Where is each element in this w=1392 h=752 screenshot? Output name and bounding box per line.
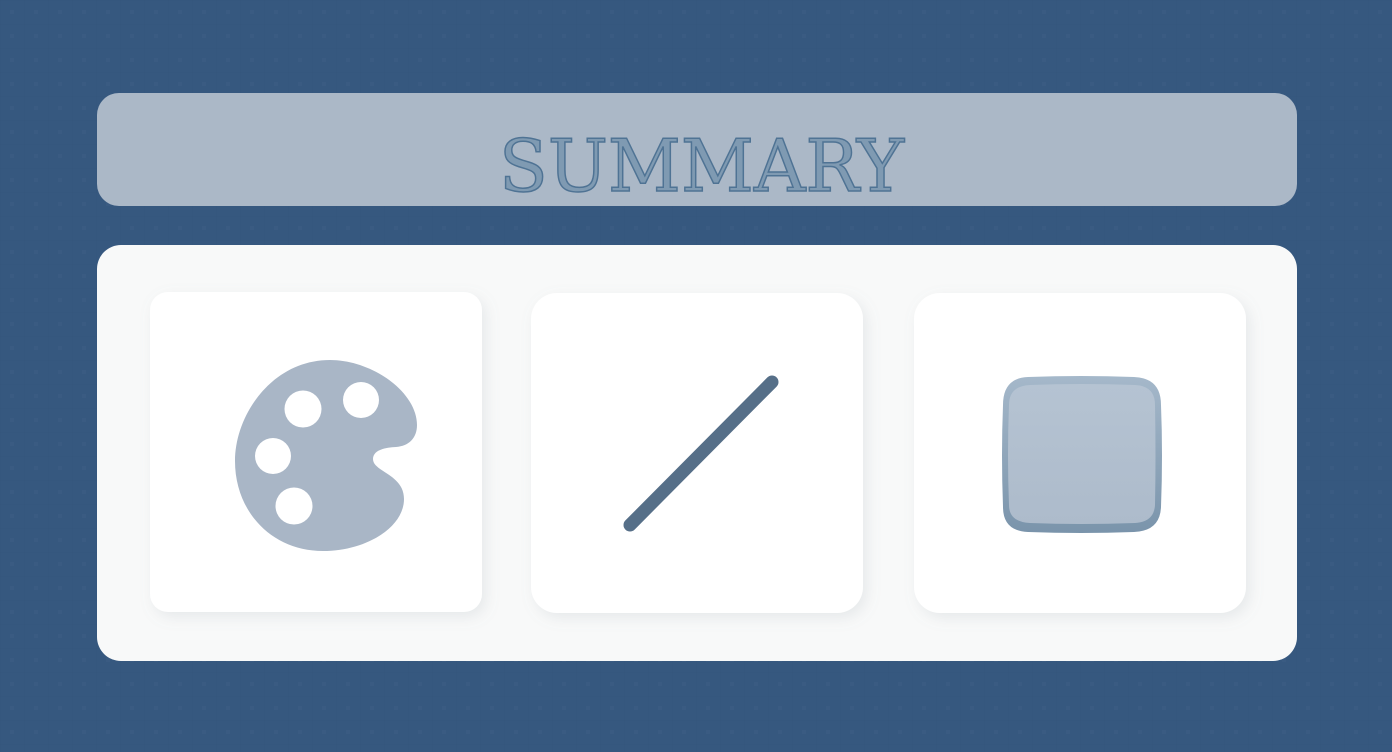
card: line	[531, 293, 863, 613]
main panel	[97, 245, 1297, 661]
card: square	[914, 293, 1246, 613]
icon: diagonal line	[630, 382, 772, 525]
title banner	[97, 93, 1297, 208]
heading: SUMMARY: SUMMARY	[499, 124, 905, 208]
icon: rounded square	[1002, 376, 1162, 533]
icon: artist palette	[235, 360, 417, 551]
card: palette	[150, 292, 482, 612]
